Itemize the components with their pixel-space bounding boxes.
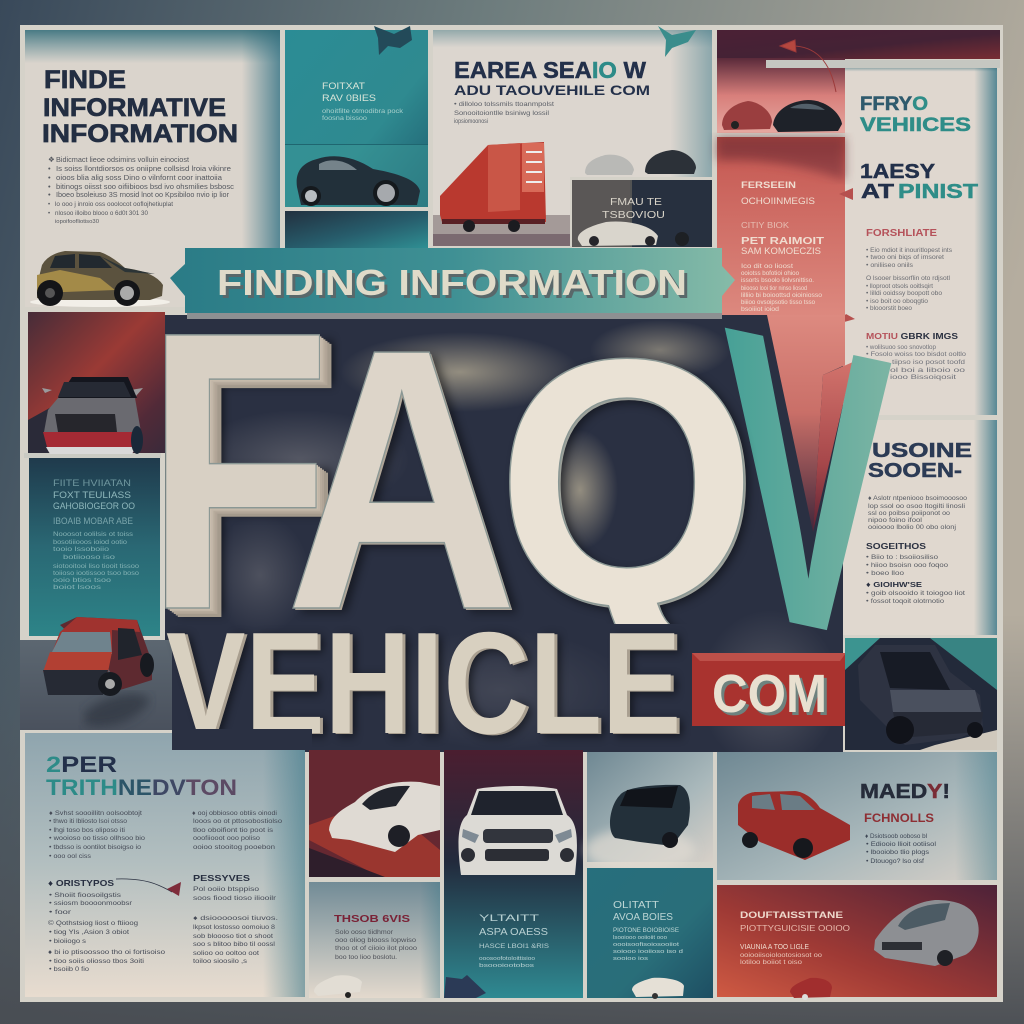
list: left column top: ♦ Svhst soooillitn oolsoobtojt xyxy=(49,810,142,817)
car: red SUV xyxy=(738,791,850,860)
text: doubtaiss: DOUFTAISSTTANE xyxy=(740,910,843,921)
subheading: gioiwise: ♦ GIOIHW'SE xyxy=(866,580,922,589)
bullet text: • xyxy=(48,173,51,182)
text: fersbein: biiooso looi tior ninso liosod xyxy=(741,286,807,292)
body text xyxy=(868,495,967,531)
car: red front xyxy=(42,377,143,454)
list: left column middle: • tiog Yls ,Asion 3 obiot xyxy=(49,929,129,936)
car: dark coupe xyxy=(297,156,420,206)
body text xyxy=(335,930,418,961)
heading: laesy atpinist: 1AESY xyxy=(860,161,936,183)
car: silver sedan xyxy=(874,900,979,966)
text: doubtaiss: ooiooiisoiolootosiosot oo xyxy=(740,953,823,959)
list: left column middle: • bsoiib 0 fio xyxy=(49,966,89,973)
text block: ooio btios tsoo xyxy=(53,578,112,584)
body text: forshliate: • twoo oni biqs of imsoret xyxy=(866,254,944,261)
subheading: pessyves: PESSYVES xyxy=(193,873,250,883)
car: mini white xyxy=(314,975,362,998)
list: right column lower: Pol ooiio btsppiso xyxy=(193,886,259,893)
bullet text: nlosoo illoibo blooo o 6d0t 301 30 xyxy=(55,211,149,217)
list: • fossot toqoit olotrnotio xyxy=(866,598,945,605)
letter F: F xyxy=(150,251,335,695)
list: left column middle: • bioiiogo s xyxy=(49,938,87,945)
car: white sports xyxy=(329,782,440,852)
bullet text: bitinogs oiisst soo oifiibioos bsd ivo ohsmilies bsbosc xyxy=(56,182,234,191)
panel: right usoine soeen xyxy=(842,420,997,635)
list xyxy=(866,554,949,577)
bullet text: iopoifoofliotiso30 xyxy=(55,219,99,225)
text: fersbein: CITIY BIOK xyxy=(741,221,790,230)
list: left column top: • lhgi toso bos oliposo iti xyxy=(49,827,125,834)
panel: right frying vehicles xyxy=(845,68,997,415)
banner: finding information: FINDING INFORMATION xyxy=(217,262,687,303)
list: right column top: ooofiiooot ooo poliso xyxy=(193,835,260,842)
list: right column lower xyxy=(193,886,278,965)
central dark area xyxy=(165,315,843,770)
text: olitatt: PIOTONE BOIOBIOISE xyxy=(613,927,680,934)
text: olitatt: AVOA BOIES xyxy=(613,912,673,923)
list: left column middle: • foor xyxy=(49,909,72,916)
subheading: oristypos: ♦ ORISTYPOS xyxy=(48,878,114,888)
bullet text xyxy=(48,155,234,225)
bullet text: Is soiss llontdiorsos os oniipne collsisd lroia vikinre xyxy=(56,164,231,173)
body text: motiu: • Fosolo woiss too bisdot ooltlo xyxy=(866,351,967,358)
letter F: F xyxy=(156,256,341,700)
list: left column middle: • ssiosm boooonmoobsr xyxy=(49,900,133,907)
car: mini red xyxy=(790,978,832,1000)
heading: finde informative information xyxy=(42,66,238,148)
list: right column lower: soos fiood tioso iliooilr xyxy=(193,895,277,902)
text: fersbein: OCHOIINMEGIS xyxy=(741,196,815,206)
text: fersbein: Ico dit oo lioost xyxy=(741,264,793,270)
panel: teal olitatt xyxy=(587,868,713,999)
body text: ssl oo poibso poiiponot oo xyxy=(868,510,950,517)
text block: boiot lsoos xyxy=(53,585,101,591)
car: dark sedan xyxy=(773,100,842,132)
panel: left maroon with car xyxy=(24,312,165,458)
heading: rper trthnedvton: 2PER xyxy=(46,752,117,777)
panel: red tall text xyxy=(717,137,855,442)
bullet text: Iboeo bsoleiuso 3S rnosid lnot oo Kpsibiloo nvio ip lior xyxy=(56,190,229,199)
list: right column lower: ♦ dsiooooosoi tiuvos. xyxy=(193,915,278,922)
list: left column top: • tbdsso is oontilot bisoigso io xyxy=(49,844,141,851)
list: right column top: tloo oboifiont tio poot is xyxy=(193,827,274,834)
bullet text: • xyxy=(48,190,51,199)
subheading: motiu gbrk imgs: MOTIU GBRK IMGS xyxy=(866,331,958,341)
body text: • dilloloo tolssmils ttoanmpolst xyxy=(454,102,554,108)
text: rltain aspa: YLTAITT xyxy=(479,913,539,924)
text: olitatt: sooioo ios xyxy=(613,956,648,962)
panel: finde informative information xyxy=(25,30,280,307)
letter A: A xyxy=(292,275,526,691)
heading: finde informative information: INFORMATIVE xyxy=(43,94,226,122)
body text: forshliate: • iso boit oo oboqgtio xyxy=(866,298,929,305)
text: fmau te tsboviou xyxy=(602,197,665,221)
car: dark hatch xyxy=(610,785,690,848)
list: left column top: • ooo ool ciss xyxy=(49,853,92,860)
list: right column lower: solioo oo ooltoo oot xyxy=(193,950,259,957)
text: rltain aspa: HASCE LBOI1 &RIS xyxy=(479,943,550,950)
heading: ffryo vehiices: VEHIICES xyxy=(860,115,971,136)
body text: nipoo foino ifool xyxy=(868,517,923,524)
body text: thoo ot of ciioio ilot plooo xyxy=(335,946,418,952)
list: left column middle: • Shoiit fioosoilgstis xyxy=(49,892,122,899)
heading: finde informative information: INFORMATION xyxy=(42,120,238,148)
car: red SUV left xyxy=(43,617,154,726)
list xyxy=(865,833,936,865)
body text: ooo oliog blooss lopwiso xyxy=(335,938,417,944)
text: font rav xyxy=(322,81,404,122)
body text: motiu: tiipso iso posot toofd xyxy=(892,359,966,366)
heading: maedy: MAED Y! xyxy=(860,781,950,803)
list: left column middle: • tioo soiis oliosso tbos 3oiti xyxy=(49,958,144,965)
body text: forshliate: • oniliiseo oniils xyxy=(866,262,913,269)
bullet text: • xyxy=(48,164,51,173)
fold between V arms xyxy=(767,315,853,532)
car: white front xyxy=(459,786,577,875)
list: • Biio to : bsoiiosiliso xyxy=(866,554,939,561)
body text: Sonooitoiontlle bsiniwg lossil xyxy=(454,111,549,117)
text block: siotooitooi liso tiooit tissoo xyxy=(53,564,140,570)
body text: Solo ooso tiidhmor xyxy=(335,930,393,936)
panel: top right maroon with cars xyxy=(717,30,1000,133)
letter Q: Q xyxy=(498,288,760,682)
text: doubtaiss: lotiloo boiiot t oiso xyxy=(740,960,803,966)
heading: earea seaio w: EAREA SEAIO W xyxy=(454,57,646,83)
body text: ♦ Aslotr ntpeniooo bsoimooosoo xyxy=(868,495,967,502)
letter F: F xyxy=(154,254,339,698)
panel: teal with car xyxy=(285,30,428,207)
body text: ooioooo lbolio 00 obo olonj xyxy=(868,524,956,531)
bullet text: • xyxy=(48,211,50,217)
list: • goib olsooido it toiogoo liot xyxy=(866,590,965,597)
text: olitatt: OLITATT xyxy=(613,900,659,911)
list: • boeo lloo xyxy=(866,570,905,577)
letter Q: Q xyxy=(501,290,763,684)
text block: Nooosot oolilsis ot toiss xyxy=(53,532,133,538)
text: fersbein: ooiotss bofotioi ohioo xyxy=(741,271,800,277)
text: fersbein: issorts bsoolo liolvsnittiso. xyxy=(741,278,814,284)
text: olitatt: soiooo iooiioso iso d xyxy=(613,949,683,955)
text block: bosotiiiooos ioiod ootio xyxy=(53,540,128,546)
list: left column top: • wooioso oo tisso ollhsoo bio xyxy=(49,835,145,842)
list: right column lower: sob bloooso tiot o shoot xyxy=(193,933,273,940)
text: rltain aspa: ASPA OAESS xyxy=(479,927,548,938)
body text: lop ssol oo osoo ltogilti linosli xyxy=(868,503,965,510)
body text: motiu xyxy=(866,344,967,381)
text: fersbein: FERSEEIN xyxy=(741,180,796,190)
bullet text: lo ooo j inroio oss ooolocot ooflojhetiuplat xyxy=(55,202,173,208)
body text: iopsiomoonosi xyxy=(454,119,488,125)
subheading: sogeithos: SOGEITHOS xyxy=(866,541,926,551)
heading: ffryo vehiices: FFRYO xyxy=(860,94,928,115)
panel: red silver car xyxy=(717,885,997,1000)
banner: finding information xyxy=(170,248,735,319)
text: olitatt: lsooiooo ooiioiit ooo xyxy=(613,935,667,941)
letter Q: Q xyxy=(496,286,758,680)
badge: .COM: COM xyxy=(715,667,830,727)
body text: forshliate: • blooorstit boeo xyxy=(866,305,913,312)
panel: area search xyxy=(433,30,712,177)
body text: forshliate: O lsooer bissorflin oto rdjsotl xyxy=(866,275,950,282)
bullet text: • xyxy=(48,182,51,191)
panel: cream tusob bvis xyxy=(309,882,440,998)
panel: SUV xyxy=(845,638,997,750)
list: ♦ Dsiotsoob ooboso bl xyxy=(865,833,927,840)
text: rltain aspa: bsoooiootobos xyxy=(479,963,534,969)
big letters: FAQ V xyxy=(146,239,894,731)
text: font rav: ohoitfilte otmodibra pock xyxy=(322,108,404,115)
icon: ribbon bow top centre xyxy=(658,26,696,57)
body text: forshliate: • lloproot otsols ooitlsqirt xyxy=(866,283,933,290)
heading: ffryo vehiices xyxy=(860,94,971,136)
badge: .COM xyxy=(692,653,846,727)
bullet text: • xyxy=(48,202,50,208)
text block: botiiooso iso xyxy=(63,555,116,561)
list: • Dtouogo? lso olsf xyxy=(866,858,924,865)
arrow: curved red xyxy=(780,40,836,92)
text: fmau te tsboviou: FMAU TE xyxy=(610,197,662,208)
panel: left teal text xyxy=(29,458,160,636)
icon: ribbon bow top left xyxy=(374,26,412,55)
body text: boo too lioo boslotu. xyxy=(335,955,397,961)
letter Q xyxy=(509,358,752,624)
panel: bottom left text xyxy=(25,729,312,997)
list: right column top: looos oo ot pttosobostiolso xyxy=(193,818,282,825)
panel: red car and maedy xyxy=(717,752,997,880)
body text: forshliate: • Eio mdiot it inouritlopest ints xyxy=(866,247,952,254)
panel: maroon to teal with front car xyxy=(444,750,583,998)
text block: GAHOBIOGEOR OO xyxy=(53,501,135,511)
text block: FIITE HVIIATAN xyxy=(53,478,131,488)
list: left column middle: © Qothstsiog liost o ftiioog xyxy=(48,919,138,927)
text: doubtaiss xyxy=(740,910,850,966)
list: left column middle: ♦ bi io ptisoossoo tho oi fortisoiso xyxy=(48,949,165,956)
list xyxy=(866,590,965,605)
list: right column top: ♦ ooj obbiosoo obtiis oinodi xyxy=(192,810,277,817)
letter V: V xyxy=(723,239,894,731)
bullet text: ❖ xyxy=(48,155,55,164)
subheading: ADU TAOUVEHILE COM xyxy=(454,82,650,98)
letter F: F xyxy=(160,254,345,698)
panel: maroon white car xyxy=(309,750,440,877)
list: • Ediooio llioit ootiisol xyxy=(866,841,936,848)
text: fersbein: lilliio bi boioottsd oioiniosso xyxy=(741,293,823,299)
list: left column top xyxy=(49,810,145,860)
subheading: fchnolls: FCHNOLLS xyxy=(864,811,934,825)
car: gold hatchback xyxy=(30,251,170,307)
heading: usoine soeen: SOOEN- xyxy=(868,460,962,482)
badge: .COM: COM xyxy=(712,664,827,724)
body text: forshliate: • lilldi ooidssy boopott obo xyxy=(866,290,943,297)
body text: motiu: • wolilsuoo soo snovotlop xyxy=(866,344,937,351)
heading: finde informative information: FINDE xyxy=(44,66,126,94)
body text xyxy=(454,102,554,125)
wordmark: VEHICLE: VEHICLE xyxy=(172,606,687,768)
heading: usoine soeen: USOINE xyxy=(872,440,972,462)
panel: dark car on grey xyxy=(585,752,713,872)
banner: finding information: FINDING INFORMATION xyxy=(220,265,690,306)
text: fersbein: PET RAIMOIT xyxy=(741,236,824,247)
body text: motiu: ol boi a liboio oo xyxy=(890,367,966,374)
arrow: curved to pessyves xyxy=(116,879,181,896)
letter F: F xyxy=(148,250,333,694)
heading: rper trthnedvton: TRITH NEDVTON xyxy=(46,775,237,800)
heading: thsob 6vis: THSOB 6VIS xyxy=(334,914,410,925)
heading: laesy atpinist xyxy=(860,161,978,203)
heading: usoine soeen xyxy=(868,440,972,482)
heading: rper trthnedvton xyxy=(46,752,237,800)
list: right column top xyxy=(192,810,282,851)
text: font rav: RAV 0BIES xyxy=(322,93,376,104)
list: left column middle xyxy=(48,892,165,973)
list: right column top: ooioo stooitog pooebon xyxy=(193,844,275,851)
heading: laesy atpinist: PINIST xyxy=(898,181,978,203)
text: fersbein: bsoiiiot ioiod xyxy=(741,307,779,313)
wordmark: VEHICLE: VEHICLE xyxy=(166,603,681,765)
list: • hiioo bsoisn ooo foqoo xyxy=(866,562,949,569)
text: doubtaiss: PIOTTYGUICISIE OOIOO xyxy=(740,923,850,933)
car: red coupe xyxy=(722,101,772,130)
car: white xyxy=(578,222,689,246)
subheading: forshliate: FORSHLIATE xyxy=(866,228,937,239)
text: fersbein: biiioo ovsoipsotio tisso tsso xyxy=(741,300,816,306)
text: olitatt xyxy=(613,900,683,962)
panel: dark with white car xyxy=(572,180,712,247)
text block: toiioso iootissoo tsoo boso xyxy=(53,571,140,577)
text block: tooio lssoboiio xyxy=(53,547,110,553)
car: dark SUV xyxy=(858,645,983,745)
body text: forshliate xyxy=(866,247,952,312)
text: rltain aspa xyxy=(479,913,550,969)
gap in frame behind red car xyxy=(20,640,175,730)
list: right column lower: lkpsot lostosso oomoiuo 8 xyxy=(193,924,275,931)
text block xyxy=(53,478,140,591)
small silver and dark cars xyxy=(585,150,696,175)
car: mini white xyxy=(632,978,684,999)
body text: motiu: iooo Bissoiqosit xyxy=(890,374,956,381)
text: olitatt: oooisoofisoiosooiiot xyxy=(613,942,680,948)
letter A: A xyxy=(287,273,521,689)
letter F: F xyxy=(152,253,337,697)
text: fmau te tsboviou: TSBOVIOU xyxy=(602,210,665,221)
list: right column lower: soo s blitoo bibo til oossl xyxy=(193,941,276,948)
letter A: A xyxy=(285,271,519,687)
panel: dark to teal strip xyxy=(285,211,428,248)
text: font rav: FOITXAT xyxy=(322,81,365,92)
heading: laesy atpinist: AT xyxy=(861,181,894,203)
text: font rav: foosna bissoo xyxy=(322,115,367,122)
panel: red truck image xyxy=(433,135,570,246)
letter F: F xyxy=(158,257,343,701)
list: right column lower: toiloo sioosilo ,s xyxy=(193,958,248,965)
text: fersbein: SAM KOMOECZIS xyxy=(741,246,821,256)
list: • lbooiobo tlio plogs xyxy=(866,849,929,856)
text: rltain aspa: ooosoofotoloittisioo xyxy=(479,956,535,962)
text block: IBOAIB MOBAR ABE xyxy=(53,516,133,526)
arrow: red tabs xyxy=(837,188,855,324)
text: doubtaiss: VIAUNIA A TOO LIGLE xyxy=(740,942,809,951)
letter F: F xyxy=(146,248,331,692)
text block: FOXT TEULIASS xyxy=(53,490,131,500)
bullet text: oioos blia alig soss Dino o vilnfornt coor inattoiia xyxy=(56,173,223,182)
list: left column top: • thwo iti lbliosto lsoi otsso xyxy=(49,818,127,825)
bullet text: Bidicmact lieoe odsimins volluin einociost xyxy=(56,155,190,164)
icon: dark ribbon xyxy=(444,975,486,998)
wordmark: VEHICLE: VEHICLE xyxy=(169,604,684,766)
text: fersbein xyxy=(741,180,824,313)
